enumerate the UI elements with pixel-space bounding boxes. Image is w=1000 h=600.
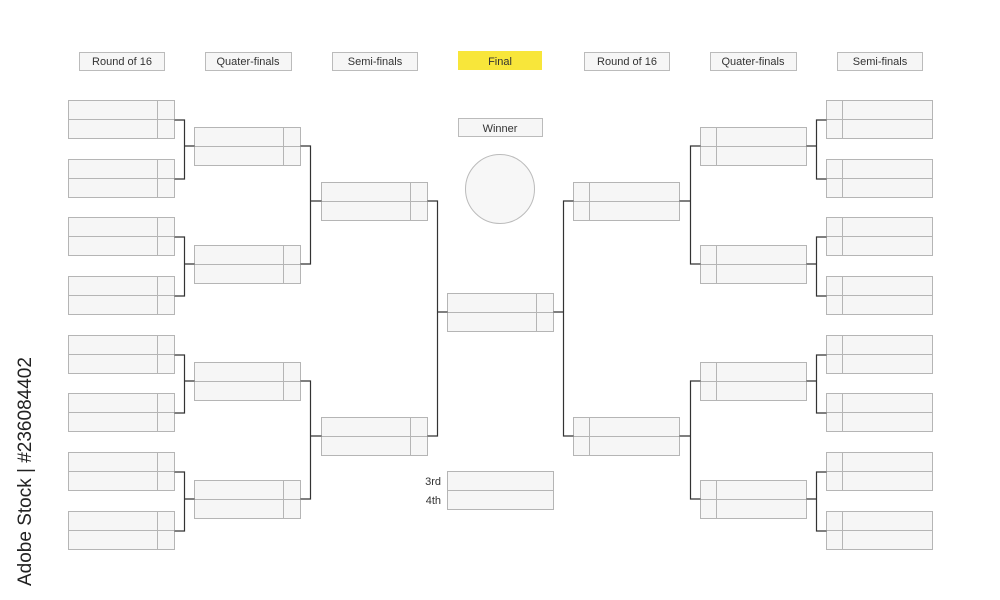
winner label [458,118,542,136]
header: Final [458,51,542,70]
3rd/4th labels: 3rd [425,476,441,488]
3rd/4th place box [447,472,554,510]
header: Quarter-finals right [710,52,796,70]
header: Quarter-finals left: Quater-finals [217,56,280,68]
header: Round of 16 right [584,52,670,70]
right round of 16 boxes [826,100,932,550]
header: Round of 16 left [80,52,164,70]
header: Final: Final [488,56,512,68]
header: Semi-finals right [838,52,922,70]
watermark text: Adobe Stock | #236084402 [15,357,36,586]
3rd/4th labels: 4th [426,495,441,507]
header: Semi-finals left: Semi-finals [348,56,403,68]
right quarter-final boxes [700,127,806,518]
header: Quarter-finals right: Quater-finals [722,56,785,68]
left round of 16 boxes [68,100,174,550]
left quarter-final boxes [194,127,300,518]
3rd/4th labels [425,476,441,507]
winner label: Winner [483,123,518,135]
final box [447,293,554,332]
header: Round of 16 right: Round of 16 [597,56,657,68]
header: Quarter-finals left [206,52,292,70]
header: Semi-finals left [332,52,418,70]
left semi-final boxes [321,182,428,456]
header: Round of 16 left: Round of 16 [92,56,152,68]
header: Semi-finals right: Semi-finals [853,56,908,68]
winner circle [466,154,534,224]
bracket connectors [174,120,826,531]
right semi-final boxes [573,182,680,456]
